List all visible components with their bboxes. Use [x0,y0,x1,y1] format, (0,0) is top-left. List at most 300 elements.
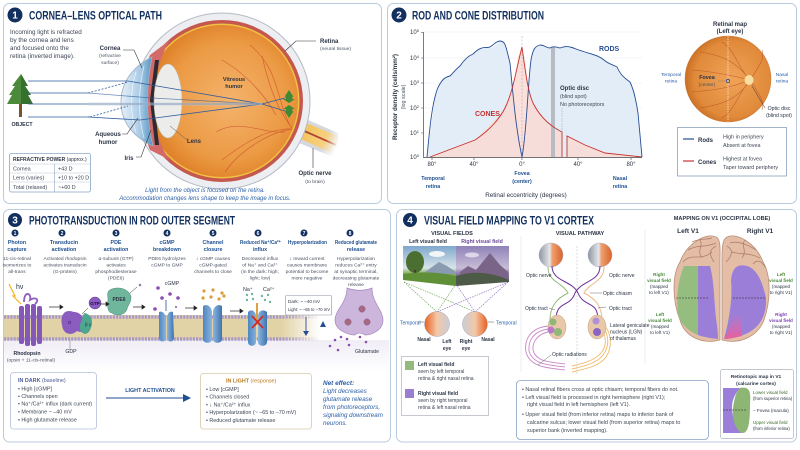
mapping labels: visual field [769,278,793,283]
number badge 1: 1 [12,11,18,22]
step 5 [194,230,232,275]
legend: rods and cones: Highest at fovea [723,156,762,162]
heading: mapping on V1: MAPPING ON V1 (OCCIPITAL LOBE) [674,216,770,222]
step 1: 1 [14,231,17,237]
step 3: (PDE6) [108,276,124,282]
table: refractive power: Cornea [13,166,31,172]
cones area [430,47,642,157]
box: in dark: • High glutamate release [18,418,77,424]
field labels [409,239,503,245]
step 6: light: low) [250,276,271,282]
labels around retinal map: Nasal [776,72,788,78]
heading: visual fields: VISUAL FIELDS [431,231,473,237]
retinotopic map box: (calcarine cortex) [736,381,776,387]
x axis ticks: 40° [469,162,479,168]
eye labels: Temporal [400,320,421,326]
step 6: of Na⁺ and Ca²⁺ [242,262,278,268]
callout: optic nerve: Optic nerve [298,171,332,177]
intro text: retina (inverted image). [10,53,75,60]
visual fields section [400,231,517,416]
step 3: PDE [111,240,122,246]
step 2: 2 [61,231,64,237]
transducin: β γ [85,322,92,327]
step 1: Photon [8,240,26,246]
y axis ticks [410,28,420,161]
closed channel with ions [243,287,275,346]
step 4: cGMP [159,240,175,246]
mapping labels: Right [653,272,665,277]
retinal map: Fovea [699,75,716,81]
net effect note: Light decreases [323,388,367,395]
x labels: Temporal [421,176,445,182]
GTP [82,297,101,314]
net effect note: signaling downstream [323,412,383,419]
step 4: PDE6 hydrolyzes [148,256,186,262]
retinotopic map box: (from inferior retina) [753,426,790,431]
step 7: ↓ Inward current [289,256,325,262]
step 2: activation [52,247,76,253]
callout: retina [285,39,351,52]
eyes [424,312,488,336]
number badge 4: 4 [407,216,413,227]
box: in light: • Channels closed [206,394,249,400]
step 7 [286,230,329,282]
step 6: (in the dark: high; [241,269,279,275]
step 6 [240,230,281,282]
voltage box: Dark: ~ –40 mV [288,299,321,304]
caption [118,188,291,202]
eye labels: eye [443,346,451,352]
table: refractive power: Total (relaxed) [13,185,47,191]
legend: visual fields: seen by right temporal [418,398,467,404]
intro text: and focused onto the [10,45,69,52]
box: in light: • Low [cGMP] [206,387,239,393]
optic disc note: Optic disc [560,86,590,92]
legend: rods and cones: High in periphery [723,134,764,140]
heading: phototransduction: PHOTOTRANSDUCTION IN ROD OUTER SEGMENT [29,216,235,228]
callout: cornea [99,46,142,68]
intro text [10,29,82,60]
table: refractive power: +10 to +20 D [58,176,89,182]
mapping labels: Left [656,312,665,317]
box: in dark: • Na⁺/Ca²⁺ influx (dark current) [18,402,92,408]
label: vitreous humor: humor [225,84,244,90]
pathway labels [525,273,650,365]
retinotopic map box: (from superior retina) [753,396,793,401]
x labels: Fovea [514,171,530,177]
table: refractive power: Lens (varies) [13,176,44,182]
pathway labels: Optic tract [609,306,632,312]
step 5: cGMP-gated [199,262,227,268]
step 5: ↓ cGMP causes [196,256,231,262]
number badge 4 [403,213,417,227]
rods line [427,41,642,157]
series label: rods: RODS [599,46,620,53]
x labels [421,171,628,190]
GTP: GTP [90,301,100,306]
pathway labels: nucleus (LGN) [610,330,643,336]
glutamate: Glutamate [355,349,379,355]
callout: retina: (neural tissue) [320,46,351,52]
mapping labels: Left [777,272,786,277]
net effect note: glutamate release [323,396,373,403]
y axis ticks: 10 [410,81,417,87]
LGN left [548,315,566,339]
table: refractive power: +43 D [58,166,73,172]
y axis ticks: 1 [417,129,420,134]
mapping labels: to left V1) [649,290,669,295]
panel: phototransduction [3,210,390,442]
mapping labels: visual field [647,278,671,283]
number badge 1 [8,8,22,22]
step 4: breakdown [153,247,181,253]
x axis ticks: 40° [573,162,583,168]
y axis ticks: 4 [417,54,420,59]
hemisphere labels: Right V1 [747,228,774,235]
x axis title: Retinal eccentricity (degrees) [485,192,567,199]
retinotopic map box [720,370,794,438]
callout: aqueous humor: Aqueous [95,132,121,138]
membrane [4,315,389,372]
label: GDP: GDP [65,349,77,355]
callout: optic nerve [298,148,332,185]
intro text: by the cornea and lens [10,37,74,44]
x axis ticks [427,162,636,168]
step 3: α-subunit (GTP) [99,256,134,262]
mapping labels: (mapped [772,284,791,289]
synaptic terminal [335,288,383,335]
labels around retinal map: Optic disc [768,106,791,112]
step 6: 6 [257,231,260,237]
panel: visual field mapping [396,210,796,442]
arrows between steps [49,302,243,313]
LGN right [588,315,606,339]
notes box [516,380,708,440]
mapping labels: to right V1) [770,330,793,335]
box: in light: • ↓ Na⁺/Ca²⁺ influx [206,402,251,408]
mapping labels [647,272,793,335]
optic disc note [560,86,605,108]
callout: lens [170,126,202,145]
callout: aqueous humor [95,118,138,146]
step 8 [333,230,380,288]
step 1: all-trans [8,269,26,275]
closed channel with ions: Ca²⁺ [263,287,275,293]
step 4: cGMP to GMP [151,262,183,268]
labels around retinal map: (blind spot) [766,113,792,119]
mapping labels: visual field [648,318,672,323]
label: retinal map: (Left eye) [717,29,743,35]
panel: rod and cone distribution [388,4,796,204]
line chart: receptor density [392,28,642,199]
step 3 [95,230,137,282]
caption: Light from the object is focused on the retina. [145,188,265,194]
step 8: release [348,282,364,288]
step 4: 4 [166,231,169,237]
step 8: decreasing glutamate [333,276,380,282]
step 2: Transducin [50,240,78,246]
net effect note: from photoreceptors, [323,404,380,411]
step 5: Channel [203,240,224,246]
legend: visual fields: seen by left temporal [418,369,464,375]
table: refractive power: ~+60 D [58,185,76,191]
optic disc note: (blind spot) [560,94,587,100]
y axis title [392,54,407,140]
step 3: activation [104,247,128,253]
x labels: retina [613,184,627,190]
step 6: Reduced Na⁺/Ca²⁺ [240,240,281,246]
PDE6 [108,284,141,315]
box: in light: • Hyperpolarization (~ –65 to –70 mV) [206,410,296,416]
step 8: Reduced glutamate [335,240,377,246]
x labels: retina [426,184,440,190]
pathway labels: Optic radiations [552,352,587,358]
legend: rods and cones: Rods [698,138,714,144]
pathway labels: Optic chiasm [603,291,632,297]
callout: iris [124,130,151,162]
arrow: light activation: LIGHT ACTIVATION [125,388,175,394]
eye labels: Right [460,339,473,345]
labels around retinal map: Temporal [661,72,681,78]
y axis ticks: 2 [417,104,420,109]
legend: rods and cones [678,128,786,176]
mapping labels: Right [775,312,787,317]
callout: cornea: (refractive [99,53,121,59]
legend: visual fields [402,356,488,416]
ciliary and iris [142,40,170,160]
step 2: activates transducin [43,262,87,268]
step 5: closure [204,247,222,253]
box: in dark: IN DARK (baseline) [18,378,66,384]
x labels: Nasal [613,176,628,182]
V1 mapping section [647,216,793,341]
step 3: phosphodiesterase [95,269,137,275]
step 8: at synaptic terminal, [334,269,378,275]
pathway labels: of thalamus [610,336,636,342]
mapping labels: (mapped [651,324,670,329]
labels around retinal map [661,72,792,119]
caption: Accommodation changes lens shape to keep the image in focus. [118,196,291,202]
lens [154,64,182,138]
heading: visual field mapping: VISUAL FIELD MAPPING TO V1 CORTEX [424,216,594,228]
legend: visual fields: retina & right nasal retina [418,376,474,382]
number badge 2 [392,8,406,22]
crossing field lines [404,282,508,312]
step 3: 3 [115,231,118,237]
right V1 regions [724,265,766,339]
step 1 [3,230,32,275]
retinal vessels [216,45,292,172]
y axis ticks: 0 [417,153,420,158]
notes box: superior bank (inverted mapping). [527,428,608,434]
mapping labels: (mapped [772,324,791,329]
retinotopic map box: – Fovea (macula) [753,408,789,413]
step 7: more negative [292,276,323,282]
notes box: right visual field in left hemisphere (left V1). [527,402,630,408]
box: in light [200,374,312,429]
notes box: • Upper visual field (from inferior retina) maps to inferior bank of [522,412,674,418]
callout: lens: Lens [187,139,202,145]
legend: visual fields: retina & left nasal retina [418,405,471,411]
cones line [430,47,642,157]
y axis ticks: 10 [410,30,417,36]
label: rhodopsin [7,351,55,364]
rods area [427,41,642,157]
pathway labels: Lateral geniculate [610,323,650,329]
hemisphere labels: Left V1 [677,228,699,235]
eye labels: eye [462,346,470,352]
series label: cones: CONES [475,111,500,118]
step 5: 5 [212,231,215,237]
pathway labels: Optic nerve [526,273,552,279]
mapping labels: (mapped [650,284,669,289]
arrow: light activation [106,388,191,402]
legend: visual fields: Right visual field [418,391,458,397]
pathway labels: Optic nerve [609,273,635,279]
panel: cornea-lens optical path [4,4,382,204]
retinotopic map box: Retinotopic map in V1 [731,374,782,380]
labels around retinal map: retina [776,78,788,84]
y axis ticks: 10 [410,106,417,112]
net effect note: Net effect: [323,380,354,387]
x axis ticks: 0° [519,162,525,168]
y axis title: (log scale) [401,84,407,109]
y axis ticks: 10 [410,131,417,137]
eye labels [400,320,517,352]
box: in dark [10,372,96,429]
optic nerve [292,113,340,160]
callout: cornea: surface) [101,60,119,66]
number badge 2: 2 [396,11,402,22]
step 2: Activated rhodopsin [44,256,87,262]
heading: visual pathway: VISUAL PATHWAY [556,231,605,237]
y axis ticks: 10 [410,56,417,62]
notes box: • Nasal retinal fibers cross at optic chiasm; temporal fibers do not. [522,387,678,393]
eyes [539,243,612,267]
step 1: 11-cis-retinal [3,256,31,262]
y axis ticks: 3 [417,79,420,84]
callout: retina: Retina [320,39,339,45]
legend: rods and cones: Taper toward periphery [723,165,778,171]
x labels: (center) [512,179,532,185]
label: vitreous humor: Vitreous [223,77,245,83]
notes box: calcarine sulcus; lower visual field (from superior retina) maps to [527,420,680,426]
x axis ticks: 80° [626,162,636,168]
eye cross-section [28,13,340,189]
inverted image [283,90,295,118]
y axis ticks: 10 [410,155,417,161]
step 8: Hyperpolarization [337,256,375,262]
retinal map: (center) [699,82,716,88]
net effect note [323,380,383,427]
eye labels: Left [442,339,452,345]
mapping labels: to left V1) [650,330,670,335]
label: vitreous humor [223,77,245,90]
axes [424,32,642,158]
nerve fibres [548,266,604,320]
transducin [62,311,92,350]
mapping labels: to right V1) [770,290,793,295]
rhodopsin [9,284,42,346]
step 6: influx [253,247,267,253]
cGMP channel: cGMP [165,281,180,287]
legend: visual fields: Left visual field [418,362,454,368]
y axis ticks: 5 [417,28,420,33]
y axis title: Receptor density (cells/mm²) [392,54,399,140]
box: in light: • Reduced glutamate release [206,418,275,424]
number badge 3: 3 [12,216,18,227]
eye labels: Nasal [417,337,431,343]
step 2 [43,230,87,275]
step 2: (G-protein) [53,269,77,275]
icon: tree object [7,74,33,117]
step 5: channels to close [194,269,232,275]
transducin: α [68,320,71,326]
closed channel with ions: Na⁺ [243,287,253,293]
closing channel [201,288,226,343]
field labels: Right visual field [461,239,503,245]
label: retinal map [713,22,747,35]
field labels: Left visual field [409,239,447,245]
legend: rods and cones: Absent at fovea [723,143,760,149]
mapping labels: visual field [769,318,793,323]
step 7: causes membrane [287,262,327,268]
callout: optic nerve: (to brain) [305,179,325,185]
retinal map [685,22,771,122]
step 1: capture [7,247,27,253]
PDE6: PDE6 [112,297,126,303]
step 8: reduces Ca²⁺ entry [335,262,377,268]
heading: rod and cone distribution: ROD AND CONE DISTRIBUTION [412,10,544,22]
legend: rods and cones: Cones [698,160,717,166]
box: in dark: • Membrane ~ –40 mV [18,410,72,416]
rhodopsin: hν [16,284,24,291]
callout: aqueous humor: humor [99,140,118,146]
cGMP channel [153,281,180,342]
step 6: Decreased influx [242,256,279,262]
retinotopic map box: Upper visual field [753,420,788,425]
step 4 [148,230,186,268]
net effect note: neurons. [323,420,347,427]
box: in dark: • Channels open [18,394,58,400]
step 3: activates [106,262,126,268]
eye labels: Nasal [481,337,495,343]
visual pathway section [521,230,650,375]
labels around retinal map: retina [665,78,677,84]
optic radiations [526,326,610,372]
step 8: 8 [349,231,352,237]
landscape image [403,246,509,286]
glutamate [329,336,379,355]
label: rhodopsin: Rhodopsin [13,351,41,357]
table: refractive power: REFRACTIVE POWER (approx.) [13,157,87,163]
number badge 3 [8,213,22,227]
pathway labels: Optic tract [525,306,548,312]
left V1 regions [677,266,698,335]
brain [674,236,769,341]
optic disc note: No photoreceptors [560,102,605,108]
step 7: potential to become [286,269,329,275]
retinotopic map box: Lower visual field [753,390,788,395]
x axis ticks: 80° [427,162,437,168]
step 7: 7 [303,231,306,237]
heading: cornea-lens optical path: CORNEA–LENS OPTICAL PATH [29,10,162,22]
step 8: release [347,247,365,253]
voltage box [286,296,332,336]
box: in dark: • High [cGMP] [18,386,52,392]
callout: iris: Iris [124,156,134,162]
callout: cornea: Cornea [100,46,121,52]
